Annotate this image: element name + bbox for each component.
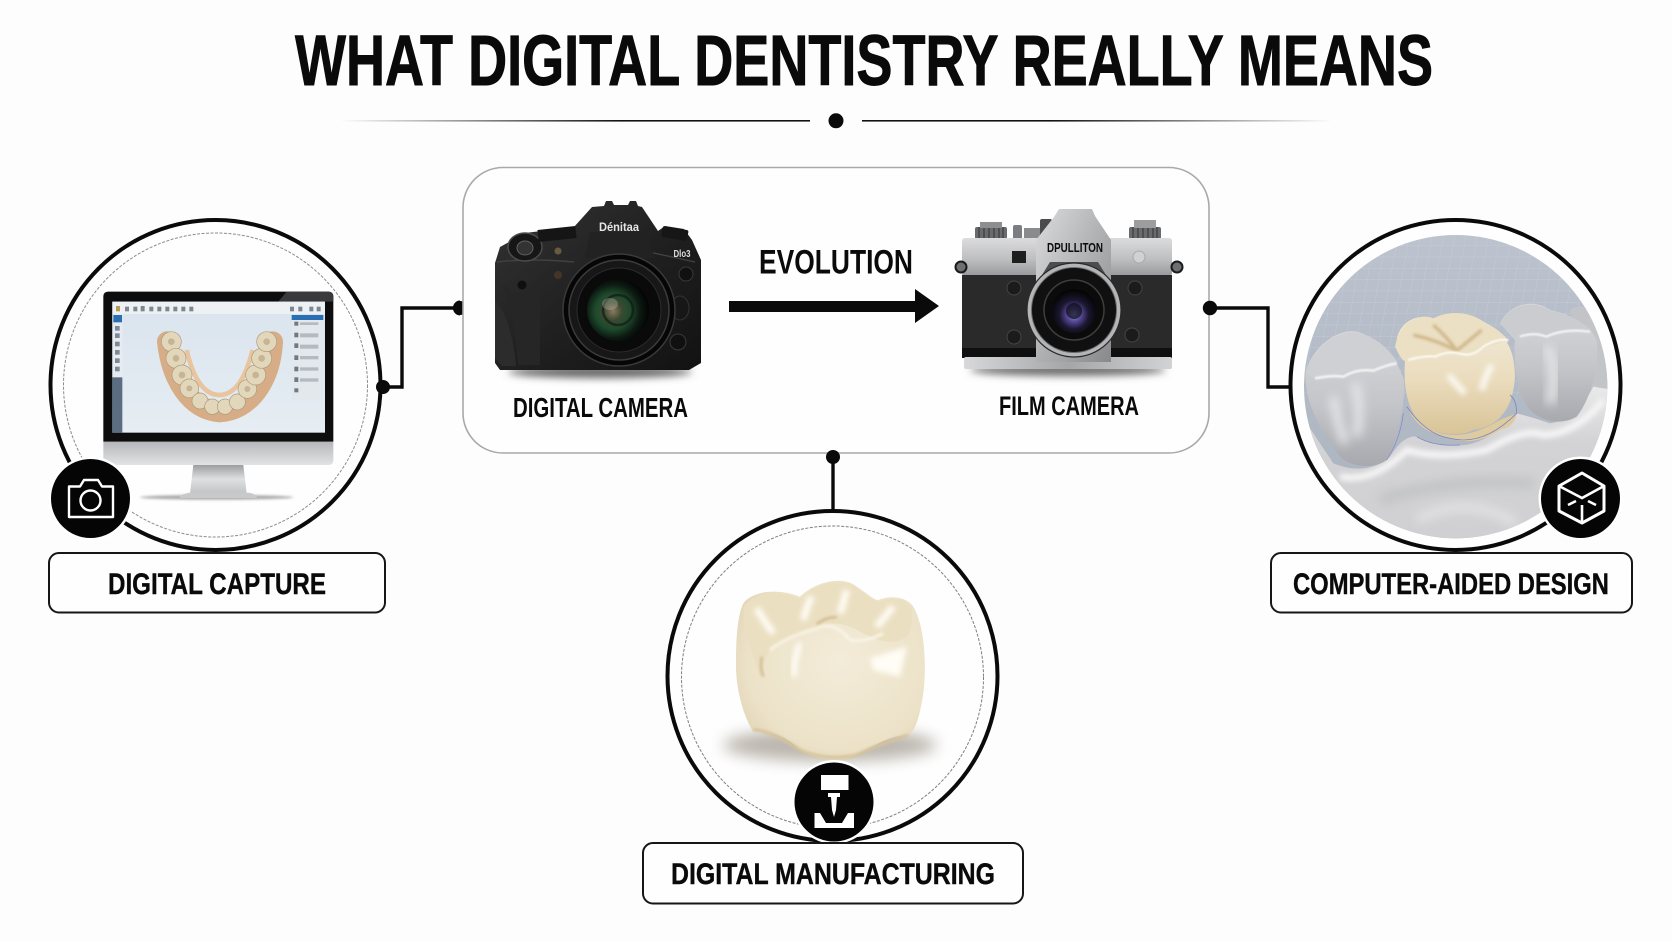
connector: camera panel to computer-aided design — [1210, 308, 1290, 387]
label: digital capture — [49, 553, 385, 612]
tooth crown design scene — [1300, 233, 1613, 547]
label: digital manufacturing — [643, 843, 1023, 904]
label: computer-aided design — [1271, 553, 1632, 612]
film camera brand lettering: DPULLITON — [1047, 241, 1103, 255]
monitor with dental scan — [103, 292, 333, 500]
dental arch scan — [161, 332, 277, 414]
film camera — [956, 209, 1182, 376]
icon: camera — [48, 456, 132, 540]
digital camera brand lettering: Dénitaa — [599, 222, 640, 234]
film camera prism — [1036, 209, 1111, 362]
ring connection dot — [376, 380, 390, 394]
film camera top dials — [975, 219, 1161, 240]
manufacturing ring — [668, 511, 998, 841]
panel: camera evolution — [463, 168, 1209, 453]
connector: camera panel to digital manufacturing — [831, 457, 835, 511]
label: digital camera: DIGITAL CAMERA — [513, 392, 688, 423]
label: evolution: EVOLUTION — [759, 244, 913, 282]
connector dots on panel — [453, 300, 1217, 464]
label: digital capture: DIGITAL CAPTURE — [108, 568, 326, 601]
icon: 3D cube — [1538, 456, 1622, 540]
panel: digital manufacturing — [643, 511, 1023, 904]
milled ceramic crown — [723, 581, 937, 762]
panel: digital capture — [48, 220, 390, 612]
design ring — [1290, 220, 1620, 550]
title divider — [340, 113, 1332, 128]
arrow: evolution — [729, 289, 939, 323]
digital camera — [495, 201, 701, 378]
digital camera: Dlo3 — [674, 249, 691, 260]
icon: milling machine — [792, 760, 876, 844]
capture ring — [50, 220, 380, 550]
label: film camera: FILM CAMERA — [999, 391, 1139, 421]
label: digital manufacturing: DIGITAL MANUFACTURING — [671, 858, 995, 891]
connector: digital capture to camera panel — [383, 301, 467, 387]
adjacent left tooth — [1306, 331, 1404, 466]
film camera lens — [1027, 263, 1121, 357]
panel: computer-aided design — [1271, 220, 1632, 612]
digital camera lens — [563, 254, 675, 366]
adjacent right tooth — [1500, 304, 1597, 422]
designed crown — [1387, 313, 1517, 460]
